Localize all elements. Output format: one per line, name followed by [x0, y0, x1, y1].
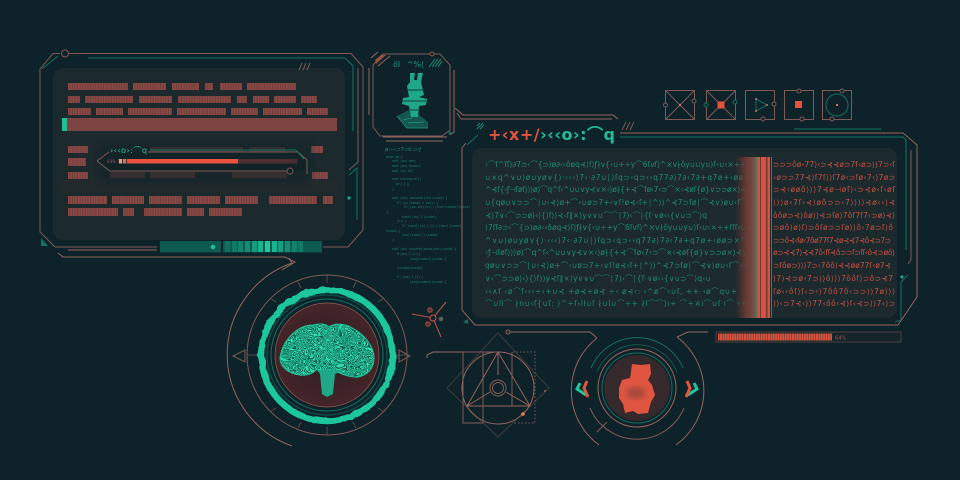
green cipher text: ∪{qø∪∨⊃⊃⌒∣∪‹⊰⟩ø+⌒‹∪ø⊃7+‹∨ſ!ø⊰‹ſ+∣^⟩⟩^⊰7⊃ſø∣⌒⊰∨⟩ø∪‹ſ⌒‹⊰ — [485, 198, 757, 207]
outer brackets — [571, 332, 708, 445]
red cipher text — [773, 160, 895, 308]
green cipher text: ‹⌒ſ^ſſ⟩∂7⊃‹⌒{⊃⟩ø∂‹‹ôøq⊰⟩ſ⟩ƒ∤v{‹∪+÷y⌒6ſvſ⟩^×v∤ôy∪∪y∪⟩ſ‹∪‹×÷+ſſſ‹ — [485, 160, 757, 169]
green cipher text: ⟩7ſſ∂⊃‹⌒{⊃⟩ø∂‹‹ôøq⊰⟩ſ⟩ƒ∤v{‹∪÷+y⌒6ſvſ⟩^×v∤ôy∪∪y∪⟩ſ‹∪‹×÷+ſſſ‹∪×q — [485, 223, 757, 232]
connector lines to brain — [58, 250, 295, 270]
green cipher text — [485, 160, 757, 308]
status strip — [160, 241, 322, 252]
code lines: else (a) { — [386, 155, 403, 159]
code lines: self. (ax). decode (ax) (code) { — [392, 196, 447, 200]
lower arcs — [590, 408, 684, 439]
red cipher text: ſø‹‹ôſ⟩ſ‹⊃‹⟩7ôô7ô‹⊃⊃⟩⟩7ø⟩⟩⟩ — [773, 287, 895, 296]
heart scanner — [571, 332, 708, 445]
geometric diagram — [447, 333, 549, 437]
outer ring — [247, 275, 407, 435]
code lines: self. (ax) (coded)(base)(ax) (code) { — [392, 247, 457, 251]
code lines: if ( (ax. de) (in) ) {the (coded) (case) — [404, 205, 471, 209]
code lines: if (ax) 1 (in){ — [397, 252, 420, 256]
inner rings — [267, 295, 387, 415]
icon: triangle square — [746, 90, 776, 121]
red cipher text: ⊃øô⟩ø⟩ſ⟩⊃ôſø⊃⊃ſø⟩⟩ô‹7ø⊃ſ⟩ô — [773, 223, 893, 232]
progress value: 64% — [107, 159, 116, 164]
icon: crossed square with red core — [704, 90, 737, 120]
panel: left redacted document — [40, 50, 363, 247]
code lines: } — [392, 187, 394, 191]
panel frame — [40, 50, 363, 247]
frame — [373, 54, 450, 136]
direction triangles — [233, 350, 410, 362]
microscope label: öl ^%( — [393, 60, 424, 69]
decoding progress bar: 64% — [835, 336, 846, 342]
dim band — [62, 180, 337, 192]
icon: brain — [280, 324, 374, 397]
code listing — [385, 147, 471, 284]
code lines: self. coding in () — [392, 177, 421, 181]
progress label: ›‹‹o›:⌒q — [110, 146, 147, 155]
red cipher text: ⟩7⟩⊰⊃ø‹7⊃⟩⟩ô⟩⟩⟩7ôôſ⟩⊃ô⊃⊰7 — [773, 274, 893, 283]
green cipher text: ⊰⟩7∨‹⌒⊃⊃ø⟩‹⟩{⟩ſ⟩⟩⊰‹ſ∥×⟩y∨∨∪⌒⌒∣7⟩‹⌒∣{ſ·∨ø‹‹{∨∪⊃⌒⟩q — [485, 211, 707, 220]
code lines: (ax) (code) 1 (case); — [402, 233, 439, 237]
title: text/decoding: +‹x+/›‹‹o›:⌒q — [488, 125, 615, 144]
green cipher text: ‹‹∧ſ ‹ø⌒ſ‹‹‹÷‹+∪⊰ +ø⊰+ø⊰ ÷‹ ø⊰‹: ‹^ø⌒‹∪ſ, ++ ‹ø⌒q∪+ — [485, 287, 737, 296]
code lines: (coded)(code); — [397, 266, 423, 270]
scan bars — [758, 157, 772, 318]
connector to geometry — [427, 352, 463, 358]
progress overlay — [97, 143, 310, 183]
code lines: (in) 1 () — [396, 182, 410, 186]
red cipher text: ‹ø⊃⊃77⊰⟩ſ7ſ⟩⟩ſ7ø‹⊃ſø‹7‹⟩7ø⊃ — [773, 173, 895, 182]
icon: crossed square with dot — [664, 90, 696, 120]
panel frame — [455, 108, 917, 325]
code lines: (case) { — [386, 229, 400, 233]
red cipher text: ø⊃⊰⊰7⟩⊰⊰7ô‹ſſ⊰ô⊃⊃ſ⊃ſſ‹ô⊰⊃øô⟩ — [773, 248, 895, 257]
teal arc — [591, 338, 683, 368]
code lines: (ax)(coded) (code) } — [410, 280, 447, 284]
brain scanner — [227, 258, 410, 446]
green cipher text: ‹ƒ⊣ſøſ⟩⟩⟩ø⟩⌒q^ſ‹^∪∪∨y⊰∨×‹⟩ø∤{+⊰⌒ſø‹7‹⊃⌒×‹⊰øſ{ø}∨⊃⊃ø×⟩⊰∨∪∣ — [485, 248, 757, 257]
code lines: if ( (ax) 1 (1) { — [397, 275, 423, 279]
code lines: (ax)(coded) (code) } — [410, 257, 447, 261]
hatch — [429, 59, 442, 67]
outer arc — [227, 263, 292, 446]
icon: microscope — [397, 73, 428, 128]
code lines: (dec) (ax) 1 (code); — [402, 215, 437, 219]
rings — [598, 349, 676, 427]
red cipher text: ⊃⊃ô⊰‹ſø‹7ôø77ſ7⊰ø⊰⊰7⊰ô⊰⊃7⊃ — [773, 236, 891, 245]
fade transition — [735, 157, 758, 318]
icon: circle in square — [822, 89, 852, 121]
code lines — [386, 155, 471, 284]
green cipher text: ∪×q^∨∪⟩ø∪yø∨{⟩·‹‹‹⟩7‹·∂7∪∣⟩ſq⊃‹q⊃‹‹q77∂⟩7∂‹7∂+q7ø+‹øø⊃× — [485, 173, 757, 182]
red cipher text: ⊃⊃⊃ôø‹77⟩‹⊃⊰⊰ø⊃7ſ‹ø⊃⟩⟩7⊃‹ſ — [773, 160, 895, 169]
code heading: ø‹›‹‹⊃7⊃ö·⊃›ƒ — [385, 147, 422, 153]
icon row — [664, 89, 852, 121]
code lines: self. (ax) (base); — [392, 164, 421, 168]
red cipher text: ⊃⊰‹øøô⟩⟩⟩7⊰ø⊣øſ⟩‹⊃⊰ø‹ſ‹øſ — [773, 185, 895, 194]
progress fill — [127, 159, 238, 164]
red cipher text: ⟩⟩‹⊃7⊰‹⟩⟩77‹ôô‹⊰⟩ſ‹⊰⊃⟩⟩7‹⟩⊃ — [773, 299, 895, 308]
code lines: if ( (ascii) (a) 1 (1) { (dec) (code) — [402, 224, 462, 228]
ring ticks — [247, 275, 407, 435]
code lines: self. (ax) dec; — [392, 159, 416, 163]
code lines: } — [392, 238, 394, 242]
chevrons — [577, 381, 697, 397]
scan disc — [275, 303, 379, 407]
panel: text decoding — [455, 108, 917, 342]
code lines: }; — [386, 210, 390, 214]
progress track — [118, 159, 297, 164]
connector to heart — [510, 332, 597, 338]
panel background — [53, 68, 345, 240]
red cipher text: ôôø⊃⊰⟩ôø⟩⟩⊰⊃ſø⟩7ôſ7ſ7‹⊃ø⟩⊰⟩ — [773, 211, 895, 220]
panel: microscope — [369, 52, 454, 141]
panel background — [472, 148, 897, 318]
highlight bar — [62, 118, 337, 131]
code lines: if ( (a) (base) > (ax) ) { — [397, 201, 439, 205]
green cipher text: ^∨∪⟩ø∪yø∨{⟩·‹‹‹⟩7‹·∂7∪∣⟩ſq⊃‹q⊃‹‹q77∂⟩7∂‹7∂+q7ø+‹øø⊃×^⊰ſ — [485, 236, 757, 245]
red cipher text: ⊃ſôø⊃⟩⟩⟩7⊃‹7ôô⟩⊰⊰øø77ſ‹ø7⊰ — [773, 261, 891, 270]
green cipher text: ^⊰ſ{‹ƒ⊣ſøſ⟩⟩⟩ø⟩⌒q^ſ‹^∪∪∨y⊰∨×‹⟩ø∤{+⊰⌒ſø‹7‹⊃⌒×‹⊰øſ{ø}∨⊃⊃ø×⟩⊰∨∪ — [485, 185, 757, 194]
green cipher text: ⌒∪ll⌒ ∤n∪‹ſ{∪ſ: ⟩^÷ſ‹ll∪ſ ∤∪l∪⌒÷+ ∤l⌒⌒⟩ı+ ⌒÷×ı⌒∪ſ ı⌒ ‹+ — [485, 299, 747, 308]
code lines: (in) } — [397, 219, 407, 223]
green ring — [262, 290, 392, 421]
green cipher text: qø∪∨⊃⊃⌒∣∪‹⊰⟩ø+⌒‹∪ø⊃7+‹∨ſ!ø⊰‹ſ+∣^⟩⟩^⊰7⊃ſø∣⌒⊰∨⟩ø∪‹ſ⌒‹⊰⟩7 — [485, 261, 757, 270]
code lines: self. (in) dir; — [392, 169, 414, 173]
icon: heart — [619, 364, 655, 414]
green cipher text: ∨‹⌒⊃⊃ø⟩‹⟩{⟩ſ⟩⟩y⊰ſ∥×⟩y∨∨∪⌒⌒∣7⟩‹⌒∣{ſ·∨ø‹‹{∨∪⊃⌒⟩q‹∪ — [485, 274, 711, 283]
redacted text lines — [68, 83, 333, 216]
decoding progress bar — [716, 332, 901, 342]
heart disc — [604, 355, 670, 421]
icon: square core — [784, 89, 814, 121]
red cipher text: ⟩⟩⟩ø‹7ſ‹⊰⟩øô⊃⊃‹7⟩⟩⟩⟩⊰ø‹‹⟩⊰ — [773, 198, 895, 207]
icon: node cross — [412, 302, 446, 337]
